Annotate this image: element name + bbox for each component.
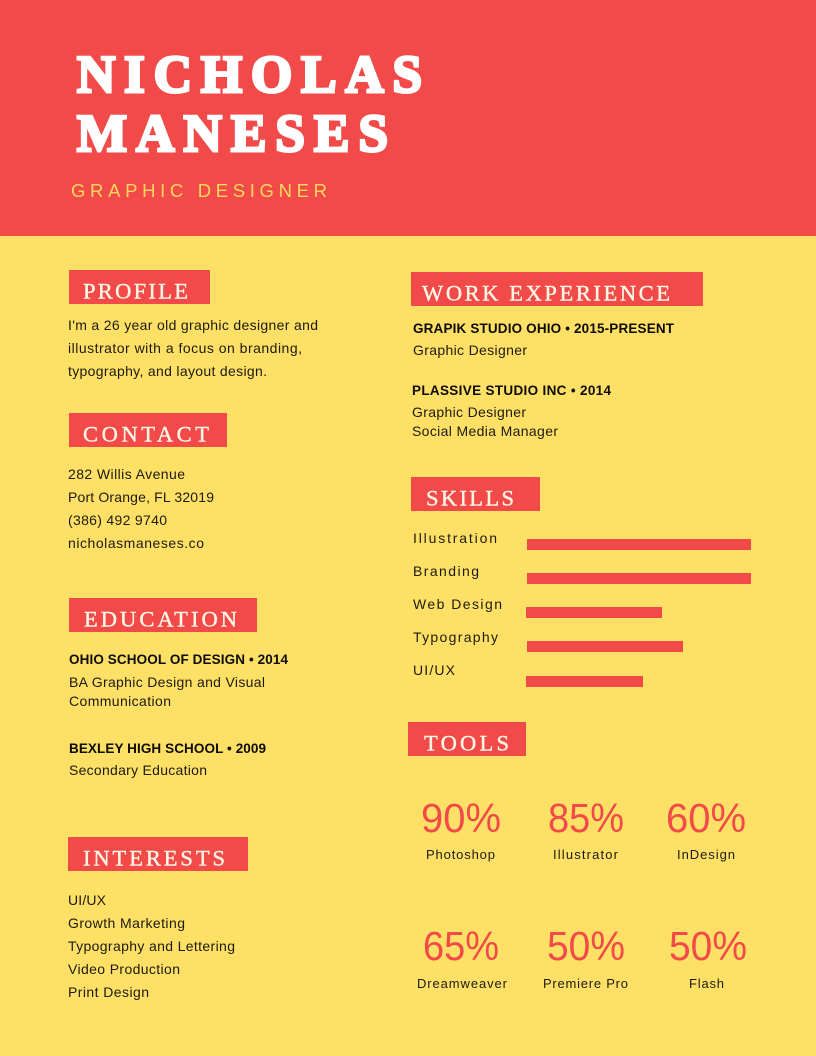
panel: tools	[408, 722, 747, 991]
profile text: I'm a 26 year old graphic designer and	[68, 317, 318, 333]
header banner	[0, 0, 816, 236]
tool: Illustrator	[548, 795, 624, 862]
interests list: UI/UX	[68, 892, 107, 908]
tool: InDesign: InDesign	[677, 847, 735, 862]
job: Plassive Studio: Social Media Manager	[412, 423, 558, 439]
skill: Typography	[413, 629, 683, 652]
profile text: typography, and layout design.	[68, 363, 267, 379]
tool: Dreamweaver: 65%	[423, 923, 499, 969]
heading: education	[69, 598, 257, 632]
education entry: Ohio School of Design: BA Graphic Design and Visual	[69, 674, 265, 690]
job title: GRAPHIC DESIGNER	[71, 180, 327, 201]
name	[77, 46, 422, 163]
skill: Web Design: Web Design	[413, 596, 502, 612]
tool: Flash: 50%	[669, 923, 747, 969]
heading: contact: CONTACT	[83, 422, 209, 446]
name: MANESES	[77, 105, 388, 163]
heading: education: EDUCATION	[84, 606, 237, 632]
interests list	[68, 892, 235, 1000]
education entry: Ohio School of Design: OHIO SCHOOL OF DESIGN • 2014	[69, 652, 288, 667]
panel: interests	[68, 837, 248, 1000]
contact details: (386) 492 9740	[68, 512, 167, 528]
education entry: Bexley High School: BEXLEY HIGH SCHOOL • 2009	[69, 741, 266, 756]
tool: Dreamweaver	[417, 923, 508, 991]
heading: contact	[69, 413, 227, 447]
heading: work experience	[411, 272, 703, 306]
skill: UI/UX: UI/UX	[413, 662, 456, 678]
heading: profile	[69, 270, 210, 304]
panel: profile	[68, 270, 318, 379]
skill: Illustration	[413, 530, 751, 550]
heading: tools	[408, 722, 526, 756]
education entry: Ohio School of Design: Communication	[69, 693, 171, 709]
contact details: 282 Willis Avenue	[68, 466, 185, 482]
education entry: Bexley High School	[69, 741, 266, 778]
panel: work experience	[411, 272, 703, 439]
tool: Dreamweaver: Dreamweaver	[417, 976, 508, 991]
tool: InDesign	[666, 795, 746, 862]
tool: Flash	[669, 923, 747, 991]
job: Plassive Studio	[412, 383, 611, 439]
skill: UI/UX	[413, 662, 643, 687]
tool: Illustrator: Illustrator	[553, 847, 619, 862]
tool: Premiere Pro: Premiere Pro	[543, 976, 628, 991]
tool: Premiere Pro: 50%	[547, 923, 625, 969]
profile text	[68, 317, 318, 379]
job: Grapik Studio: GRAPIK STUDIO OHIO • 2015-PRESENT	[413, 321, 675, 336]
interests list: Print Design	[68, 984, 149, 1000]
profile text: illustrator with a focus on branding,	[68, 340, 302, 356]
panel: contact	[68, 413, 227, 551]
job: Grapik Studio: Graphic Designer	[413, 342, 527, 358]
panel: education	[69, 598, 288, 778]
tool: Illustrator: 85%	[548, 795, 624, 841]
education entry: Bexley High School: Secondary Education	[69, 762, 207, 778]
job: Grapik Studio	[413, 321, 675, 358]
interests list: Growth Marketing	[68, 915, 185, 931]
heading: profile: PROFILE	[83, 278, 188, 304]
tool: Photoshop: Photoshop	[426, 847, 495, 862]
skill: Branding	[413, 563, 751, 584]
heading: work experience: WORK EXPERIENCE	[422, 280, 670, 306]
tool: InDesign: 60%	[666, 795, 746, 841]
interests list: Video Production	[68, 961, 180, 977]
heading: skills: SKILLS	[426, 486, 514, 510]
contact details: Port Orange, FL 32019	[68, 489, 214, 505]
contact details	[68, 466, 214, 551]
interests list: Typography and Lettering	[68, 938, 235, 954]
skill: Branding: Branding	[413, 563, 479, 579]
job: Plassive Studio: Graphic Designer	[412, 404, 526, 420]
heading: skills	[411, 477, 540, 511]
heading: interests	[68, 837, 248, 871]
tool: Premiere Pro	[543, 923, 628, 991]
education entry: Ohio School of Design	[69, 652, 288, 709]
skill: Web Design	[413, 596, 662, 618]
contact details: nicholasmaneses.co	[68, 535, 204, 551]
name: NICHOLAS	[77, 46, 422, 104]
tool: Photoshop	[421, 795, 501, 862]
skill: Illustration: Illustration	[413, 530, 497, 546]
job: Plassive Studio: PLASSIVE STUDIO INC • 2014	[412, 383, 611, 398]
panel: skills	[411, 477, 751, 687]
heading: tools: TOOLS	[424, 730, 509, 756]
tool: Photoshop: 90%	[421, 795, 501, 841]
tool: Flash: Flash	[689, 976, 724, 991]
heading: interests: INTERESTS	[83, 846, 225, 870]
skill: Typography: Typography	[413, 629, 498, 645]
